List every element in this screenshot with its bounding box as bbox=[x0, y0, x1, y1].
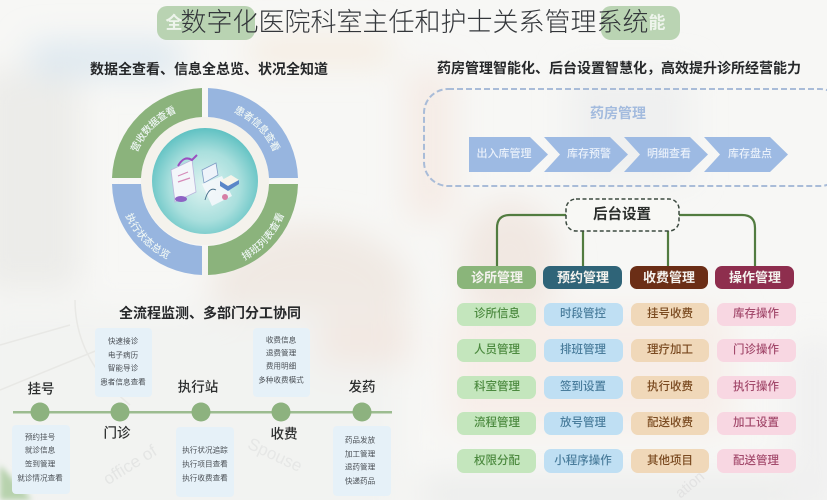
step: dispensing: 退药管理 bbox=[345, 462, 376, 472]
column: clinic items: 人员管理 bbox=[474, 342, 520, 356]
step: billing bbox=[253, 328, 310, 442]
faded header pills: 能 bbox=[648, 14, 666, 32]
category: operation management: 操作管理 bbox=[729, 270, 781, 285]
step: execution station bbox=[176, 380, 234, 497]
segment: schedule list: 排班列表查看 bbox=[242, 212, 284, 261]
column: clinic items: 权限分配 bbox=[474, 453, 520, 467]
step: stock alert bbox=[544, 137, 628, 172]
step: execution station: 执行站 bbox=[178, 380, 219, 394]
segment: execution status bbox=[112, 184, 202, 275]
segment: revenue data: 营收数据查看 bbox=[130, 106, 176, 152]
step: registration: 挂号 bbox=[28, 382, 54, 396]
segment: revenue data bbox=[112, 88, 202, 178]
column: clinic items: 科室管理 bbox=[474, 379, 520, 393]
category: appointment management: 预约管理 bbox=[557, 270, 609, 285]
column: billing items: 配送收费 bbox=[647, 415, 693, 429]
column: billing items: 执行收费 bbox=[647, 379, 693, 393]
step: stock in and out: 出入库管理 bbox=[476, 146, 532, 160]
column: operation items bbox=[717, 303, 796, 473]
step: billing: 收费 bbox=[270, 426, 298, 442]
step: registration: 预约挂号 bbox=[25, 432, 56, 442]
segment: schedule list bbox=[208, 184, 298, 275]
panel: pharmacy management bbox=[424, 89, 827, 186]
column: operation items: 门诊操作 bbox=[733, 342, 779, 356]
background photo wash: Spouse bbox=[245, 434, 305, 476]
column: appointment items: 小程序操作 bbox=[554, 453, 612, 467]
step: billing: 费用明细 bbox=[266, 360, 297, 370]
connector lines bbox=[497, 215, 755, 266]
step: registration: 就诊信息 bbox=[25, 444, 56, 454]
timeline line bbox=[13, 411, 392, 414]
ring chart bbox=[112, 88, 298, 275]
faded header pills: 全 bbox=[166, 12, 182, 32]
heading: process monitoring: 全流程监测、多部门分工协同 bbox=[119, 305, 301, 321]
center circle bbox=[152, 128, 258, 234]
step: execution station: 执行状况追踪 bbox=[182, 444, 228, 454]
column: operation items: 加工设置 bbox=[733, 415, 779, 429]
column: appointment items: 排班管理 bbox=[560, 342, 606, 356]
heading: pharmacy and backend: 药房管理智能化、后台设置智慧化，高效提升诊所经营能力 bbox=[437, 60, 801, 76]
column: clinic items bbox=[457, 303, 536, 473]
column: billing items: 理疗加工 bbox=[647, 342, 693, 356]
step: dispensing: 快递药品 bbox=[345, 476, 376, 486]
segment: patient info bbox=[208, 88, 298, 178]
column: billing items bbox=[631, 303, 709, 473]
segment: execution status: 执行状态总览 bbox=[125, 213, 170, 260]
step: detail view bbox=[624, 137, 708, 172]
step: billing: 多种收费模式 bbox=[258, 374, 304, 384]
segment: patient info: 患者信息查看 bbox=[234, 106, 281, 152]
timeline bbox=[12, 328, 392, 497]
title: 数字化医院科室主任和护士关系管理系统 bbox=[180, 7, 649, 37]
step: registration: 就诊情况查看 bbox=[17, 472, 63, 482]
step: registration bbox=[12, 382, 70, 494]
step: stock alert: 库存预警 bbox=[567, 146, 611, 160]
step: outpatient: 电子病历 bbox=[108, 350, 139, 360]
column: appointment items: 签到设置 bbox=[560, 379, 606, 393]
step: dispensing: 加工管理 bbox=[345, 448, 376, 458]
step: dispensing: 发药 bbox=[348, 380, 376, 394]
category: clinic management: 诊所管理 bbox=[471, 270, 523, 285]
column: operation items: 库存操作 bbox=[733, 306, 779, 320]
pharmacy heading: 药房管理 bbox=[590, 105, 646, 121]
column: appointment items: 放号管理 bbox=[560, 415, 606, 429]
step: outpatient: 智能导诊 bbox=[108, 362, 139, 372]
column: billing items: 挂号收费 bbox=[647, 306, 693, 320]
step: billing: 退费管理 bbox=[266, 348, 297, 358]
step: dispensing bbox=[333, 380, 391, 496]
column: appointment items bbox=[544, 303, 623, 473]
column: operation items: 配送管理 bbox=[733, 453, 779, 467]
step: stock count bbox=[704, 137, 788, 172]
icon: medical data illustration bbox=[171, 155, 239, 206]
step: outpatient: 门诊 bbox=[104, 426, 131, 440]
step: execution station: 执行收费查看 bbox=[182, 472, 228, 482]
category: operation management bbox=[715, 266, 794, 289]
step: dispensing: 药品发放 bbox=[345, 434, 376, 444]
step: billing: 收费信息 bbox=[266, 334, 297, 344]
panel: backend settings tree bbox=[457, 199, 794, 289]
backend settings node bbox=[566, 199, 679, 231]
category: appointment management bbox=[543, 266, 622, 289]
step: registration: 签到管理 bbox=[25, 458, 56, 468]
column: operation items: 执行操作 bbox=[733, 379, 779, 393]
step: outpatient: 患者信息查看 bbox=[100, 376, 146, 386]
column: appointment items: 时段管控 bbox=[560, 306, 606, 320]
column: clinic items: 诊所信息 bbox=[474, 306, 520, 320]
heading: data overview: 数据全查看、信息全总览、状况全知道 bbox=[90, 61, 328, 77]
backend settings node: 后台设置 bbox=[593, 205, 651, 223]
background photo wash: office of bbox=[100, 441, 160, 489]
category: clinic management bbox=[457, 266, 536, 289]
step: outpatient bbox=[95, 328, 152, 440]
step: execution station: 执行项目查看 bbox=[182, 458, 228, 468]
step: outpatient: 快速接诊 bbox=[108, 336, 139, 346]
ring inner background bbox=[141, 117, 269, 245]
step: stock count: 库存盘点 bbox=[728, 146, 772, 160]
column: clinic items: 流程管理 bbox=[474, 415, 520, 429]
column: billing items: 其他项目 bbox=[647, 454, 693, 467]
step: detail view: 明细查看 bbox=[647, 146, 691, 160]
category: billing management bbox=[630, 266, 708, 289]
faded header pills bbox=[157, 6, 680, 40]
step: stock in and out bbox=[469, 137, 548, 172]
category: billing management: 收费管理 bbox=[643, 270, 695, 285]
